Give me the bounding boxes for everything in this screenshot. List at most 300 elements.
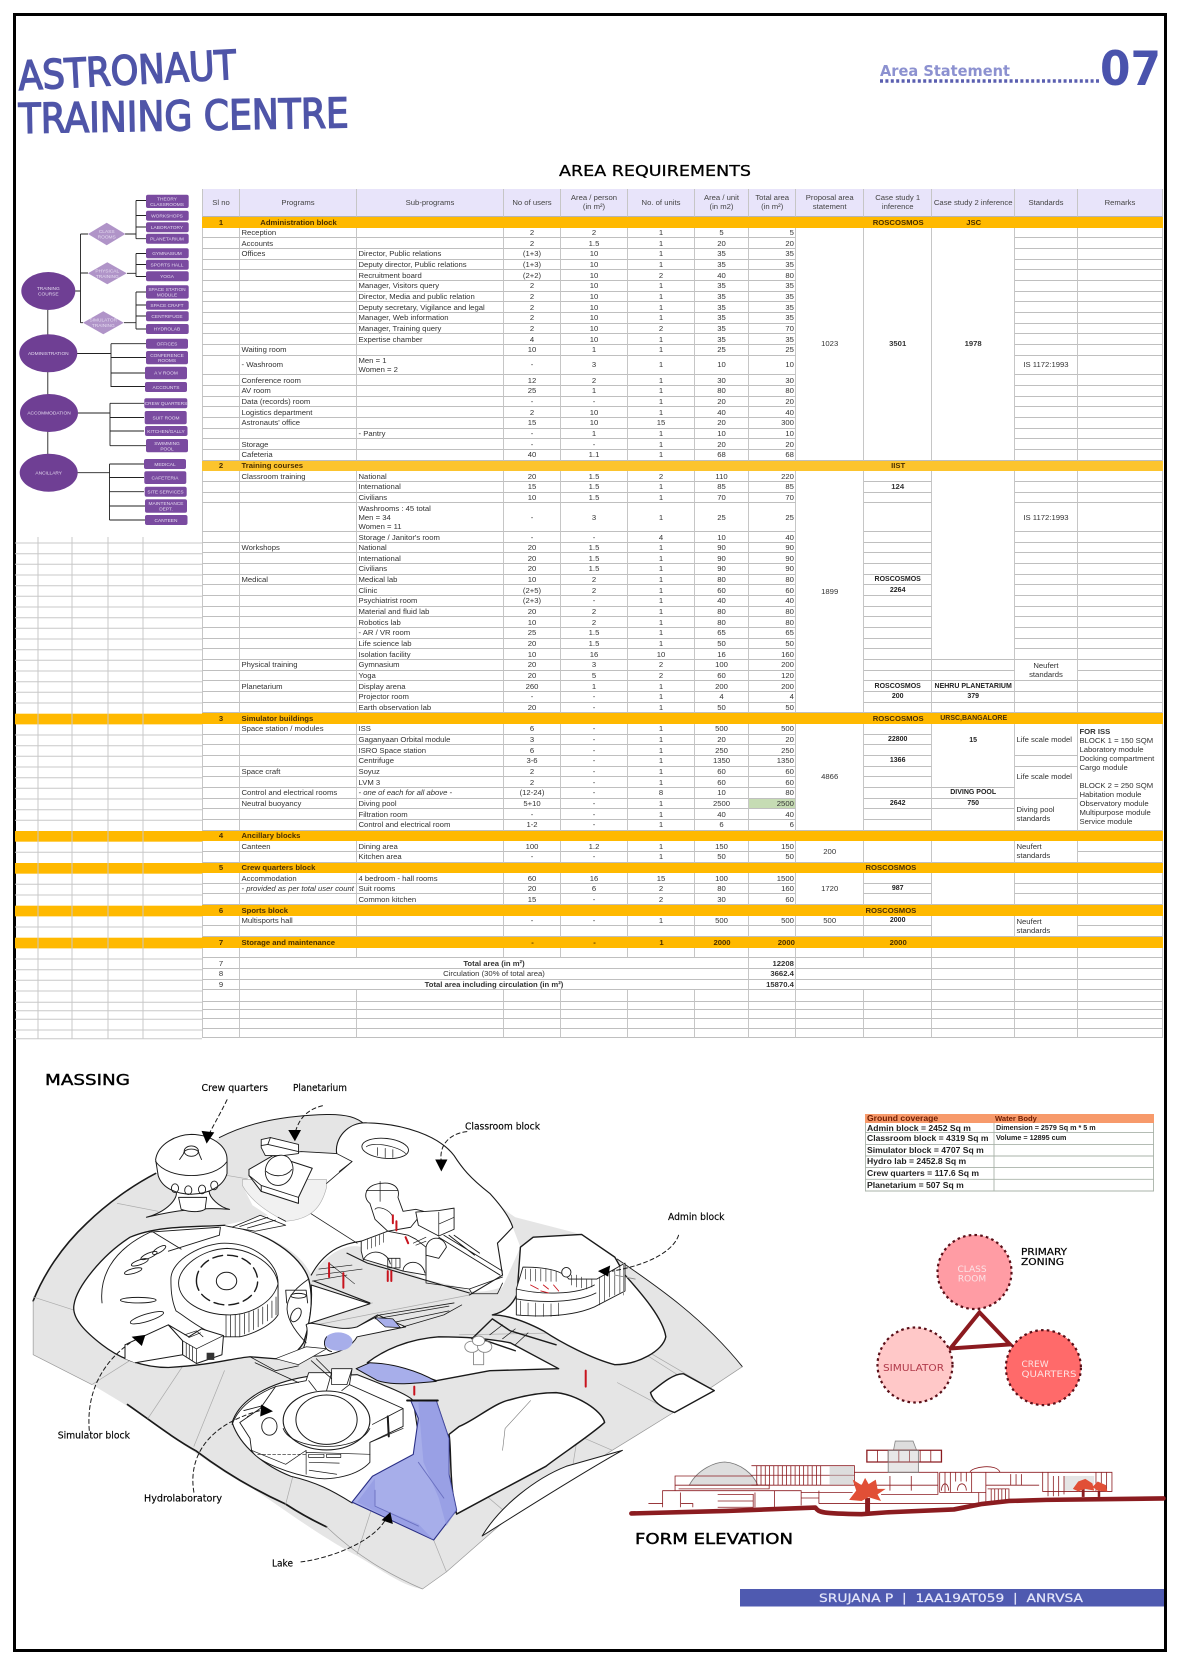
water body rows bbox=[996, 1123, 1096, 1142]
programme box labels: PLANETARIUM bbox=[150, 236, 184, 242]
area requirements table: - bbox=[593, 724, 595, 733]
area requirements table: 10 bbox=[590, 260, 598, 269]
area requirements table: - bbox=[593, 895, 595, 904]
area requirements table: 10 bbox=[717, 360, 726, 369]
area requirements table: - bbox=[593, 852, 595, 861]
programme box labels: SWIMMING bbox=[154, 441, 180, 447]
area requirements table: Women = 2 bbox=[358, 365, 398, 374]
area requirements table: 1720 bbox=[821, 884, 838, 893]
area requirements table: 80 bbox=[785, 271, 794, 280]
area requirements table: 2642 bbox=[890, 800, 905, 807]
programme box labels: DEPT. bbox=[159, 506, 173, 512]
area requirements table: 12208 bbox=[772, 959, 794, 968]
area requirements table: Suit rooms bbox=[358, 884, 395, 893]
area requirements table: 68 bbox=[717, 450, 726, 459]
sheet heading: area statement and number: 07 bbox=[1100, 42, 1161, 97]
area requirements table: 1 bbox=[659, 228, 663, 237]
area requirements table: 80 bbox=[717, 575, 726, 584]
diamond labels: ROOMS bbox=[98, 234, 116, 240]
area requirements table: 10 bbox=[590, 271, 598, 280]
area requirements table: Women = 11 bbox=[358, 522, 402, 531]
area requirements table: Habitation module bbox=[1079, 790, 1141, 799]
area requirements table: 70 bbox=[717, 493, 726, 502]
ground line bbox=[631, 1498, 1163, 1514]
programme box labels: MAINTENANCE bbox=[149, 501, 183, 507]
area requirements table: 20 bbox=[717, 397, 726, 406]
white block: central classroom plateau bbox=[224, 1123, 520, 1292]
area requirements table: 40 bbox=[785, 596, 794, 605]
area requirements table: 2 bbox=[659, 671, 663, 680]
area requirements table: DIVING POOL bbox=[950, 789, 996, 796]
area requirements table: ISRO Space station bbox=[358, 746, 426, 755]
area requirements table: 1 bbox=[659, 842, 663, 851]
area requirements table: 100 bbox=[715, 660, 728, 669]
zone: simulator: SIMULATOR bbox=[883, 1363, 944, 1374]
area requirements table: Reception bbox=[242, 228, 276, 237]
area requirements table: 2 bbox=[530, 239, 534, 248]
area requirements table: Total area (in m²) bbox=[463, 959, 525, 968]
area requirements table: Recruitment board bbox=[358, 271, 422, 280]
area requirements table: 5 bbox=[592, 671, 596, 680]
area requirements table: 6 bbox=[592, 884, 596, 893]
massing labels: Lake bbox=[272, 1558, 293, 1570]
area requirements table: 1 bbox=[659, 799, 663, 808]
area requirements table: 1023 bbox=[821, 339, 838, 348]
area requirements table: 1-2 bbox=[526, 820, 538, 829]
area requirements table: 50 bbox=[717, 703, 726, 712]
area requirements table: 20 bbox=[528, 554, 536, 563]
area requirements table: Filtration room bbox=[358, 810, 408, 819]
hydrolaboratory bbox=[232, 1369, 403, 1479]
area requirements table: 10 bbox=[590, 408, 598, 417]
area requirements table: 1 bbox=[659, 493, 663, 502]
area requirements table: 110 bbox=[715, 472, 728, 481]
area requirements table: 10 bbox=[717, 788, 726, 797]
area requirements table: Workshops bbox=[242, 543, 280, 552]
area requirements table: 2 bbox=[592, 586, 596, 595]
area requirements table: - bbox=[593, 799, 595, 808]
area requirements table: BLOCK 2 = 250 SQM bbox=[1079, 781, 1153, 790]
ellipse labels: TRAINING bbox=[37, 286, 60, 292]
classroom section bbox=[940, 1467, 1043, 1502]
area requirements table: 1 bbox=[659, 852, 663, 861]
area requirements table: 80 bbox=[717, 386, 726, 395]
area requirements table: 4 bbox=[530, 335, 534, 344]
area requirements table: 6 bbox=[790, 820, 794, 829]
ellipse labels: ACCOMMODATION bbox=[27, 411, 71, 417]
area requirements table: 10 bbox=[657, 650, 665, 659]
area requirements table: Multipurpose module bbox=[1079, 808, 1151, 817]
area requirements table: 1.5 bbox=[589, 543, 599, 552]
programme box labels: SPACE STATION bbox=[148, 287, 186, 293]
area requirements table: 2000 bbox=[890, 938, 907, 947]
small pool bbox=[324, 1332, 353, 1351]
area requirements table: 300 bbox=[781, 418, 794, 427]
area requirements table: 20 bbox=[528, 660, 536, 669]
area requirements table: 80 bbox=[785, 607, 794, 616]
area requirements table: Space station / modules bbox=[242, 724, 324, 733]
tower bbox=[867, 1441, 941, 1472]
area requirements table: Robotics lab bbox=[358, 618, 401, 627]
area requirements table: 90 bbox=[785, 564, 794, 573]
area requirements table: 10 bbox=[528, 575, 536, 584]
area requirements table: Area / unit bbox=[704, 193, 739, 202]
area requirements table: 1 bbox=[659, 303, 663, 312]
area requirements table: 35 bbox=[785, 292, 794, 301]
area requirements table: 68 bbox=[785, 450, 794, 459]
area requirements table: 200 bbox=[781, 660, 794, 669]
ground coverage rows: Admin block = 2452 Sq m bbox=[867, 1123, 971, 1133]
area requirements table: Service module bbox=[1079, 817, 1132, 826]
area requirements table: 50 bbox=[785, 852, 794, 861]
area requirements table: 4 bbox=[719, 692, 724, 701]
area requirements table: 25 bbox=[785, 345, 794, 354]
simulator block bbox=[102, 1227, 309, 1364]
area requirements table: International bbox=[358, 482, 401, 491]
area requirements table: 90 bbox=[785, 543, 794, 552]
label: primary zoning: ZONING bbox=[1021, 1257, 1064, 1268]
area requirements table: 25 bbox=[717, 513, 726, 522]
area requirements table: 10 bbox=[590, 303, 598, 312]
connectors bbox=[48, 200, 146, 520]
zone: crew quarters: CREW bbox=[1022, 1360, 1049, 1370]
area requirements table: - bbox=[531, 916, 533, 925]
area requirements table: 1 bbox=[592, 682, 596, 691]
area requirements table: 2 bbox=[530, 767, 534, 776]
area requirements table: 65 bbox=[717, 628, 726, 637]
area requirements table: 1 bbox=[659, 607, 663, 616]
area requirements table: 1 bbox=[659, 543, 663, 552]
programme box labels: OFFICES bbox=[157, 342, 177, 348]
area requirements table: Neufert bbox=[1016, 917, 1042, 926]
area requirements table: (1+3) bbox=[523, 249, 541, 258]
area requirements table: 85 bbox=[717, 482, 726, 491]
area requirements table: URSC,BANGALORE bbox=[940, 715, 1007, 722]
area requirements table: 70 bbox=[785, 324, 794, 333]
area requirements table: Director, Public relations bbox=[358, 249, 441, 258]
area requirements table: 10 bbox=[590, 292, 598, 301]
simulator service wing bbox=[125, 1325, 183, 1363]
area requirements table: 1 bbox=[659, 260, 663, 269]
area requirements table: Centrifuge bbox=[358, 756, 394, 765]
service strip to hydrolab bbox=[250, 1357, 334, 1383]
area requirements table: 250 bbox=[781, 746, 794, 755]
area requirements table: 2000 bbox=[778, 938, 795, 947]
area requirements table: 30 bbox=[717, 376, 726, 385]
area requirements table: 2 bbox=[659, 884, 663, 893]
area requirements table: 2 bbox=[530, 281, 534, 290]
area requirements table: (2+2) bbox=[523, 271, 541, 280]
lake bbox=[352, 1401, 457, 1540]
area requirements table: 1 bbox=[659, 345, 663, 354]
area requirements table: - AR / VR room bbox=[358, 628, 410, 637]
area requirements table: Total area including circulation (in m²) bbox=[425, 980, 563, 989]
classroom block details bbox=[311, 1136, 503, 1303]
area requirements table: Offices bbox=[242, 249, 265, 258]
programme box labels: SITE SERVICES bbox=[147, 490, 184, 496]
massing axonometric drawing bbox=[32, 1099, 743, 1590]
area requirements table: 1 bbox=[659, 408, 663, 417]
area requirements table: 35 bbox=[717, 324, 726, 333]
area requirements table: 40 bbox=[528, 450, 536, 459]
area requirements table: 2500 bbox=[713, 799, 730, 808]
area requirements table: 20 bbox=[528, 607, 536, 616]
form elevation heading: FORM ELEVATION bbox=[635, 1530, 793, 1548]
heading: area requirements: AREA REQUIREMENTS bbox=[559, 162, 751, 180]
area requirements table: 10 bbox=[528, 618, 536, 627]
area requirements table: 1.5 bbox=[589, 554, 599, 563]
diamond nodes bbox=[83, 223, 127, 334]
area requirements table: standards bbox=[1029, 670, 1063, 679]
area requirements table: JSC bbox=[966, 218, 981, 227]
area requirements table: 20 bbox=[528, 703, 536, 712]
area requirements table: Life science lab bbox=[358, 639, 412, 648]
area requirements table: 35 bbox=[717, 249, 726, 258]
area requirements table: 1 bbox=[659, 440, 663, 449]
area requirements table: 60 bbox=[785, 767, 794, 776]
ground coverage table bbox=[865, 1113, 1154, 1192]
area requirements table: 1 bbox=[659, 292, 663, 301]
area requirements table: 8 bbox=[659, 788, 663, 797]
area requirements table: 1.5 bbox=[589, 239, 599, 248]
area requirements table: 1978 bbox=[965, 339, 982, 348]
programme box labels: CAFETERIA bbox=[152, 475, 179, 481]
area requirements table: Standards bbox=[1028, 198, 1063, 207]
area requirements table: 1 bbox=[659, 767, 663, 776]
area requirements table: 5 bbox=[219, 863, 223, 872]
area requirements table: 90 bbox=[785, 554, 794, 563]
massing labels: Admin block bbox=[668, 1212, 725, 1223]
area requirements table: standards bbox=[1016, 926, 1050, 935]
area requirements table: Classroom training bbox=[242, 472, 306, 481]
programme box labels: GYMNASIUM bbox=[152, 251, 182, 257]
area requirements table: 15 bbox=[657, 874, 665, 882]
small trees bbox=[1073, 1479, 1107, 1497]
area requirements table: 3 bbox=[592, 513, 596, 522]
area requirements table: 1500 bbox=[777, 874, 794, 882]
area requirements table: (12-24) bbox=[520, 788, 544, 797]
area requirements table: 200 bbox=[715, 682, 728, 691]
diamond labels: PHYSICAL bbox=[95, 268, 119, 274]
diamond labels bbox=[90, 229, 119, 329]
area requirements table: Neufert bbox=[1033, 661, 1059, 670]
area requirements table: 50 bbox=[717, 639, 726, 648]
zone: simulator bbox=[878, 1328, 952, 1402]
area requirements table: Physical training bbox=[242, 660, 297, 669]
area requirements table: Storage / Janitor's room bbox=[358, 532, 440, 542]
arrow: hydrolaboratory bbox=[193, 1405, 273, 1492]
header row bbox=[865, 1114, 1154, 1123]
area requirements table: 4 bbox=[219, 831, 223, 840]
area requirements table: 16 bbox=[590, 874, 598, 882]
area requirements table: 120 bbox=[781, 671, 794, 680]
area requirements table: 1.1 bbox=[589, 450, 599, 459]
area requirements table: 25 bbox=[785, 513, 794, 522]
area requirements table: - bbox=[593, 746, 595, 755]
credits bar: SRUJANA P | 1AA19AT059 | ANRVSA bbox=[819, 1591, 1083, 1605]
zone: crew quarters bbox=[1006, 1330, 1081, 1405]
area requirements table: Soyuz bbox=[358, 767, 380, 776]
area requirements table: Director, Media and public relation bbox=[358, 292, 475, 301]
area requirements table: 50 bbox=[785, 639, 794, 648]
area requirements table: 2 bbox=[530, 303, 534, 312]
area requirements table: 200 bbox=[823, 847, 836, 856]
area requirements table: 6 bbox=[719, 820, 724, 829]
area requirements table: 35 bbox=[717, 292, 726, 301]
area requirements table: 15 bbox=[528, 418, 536, 427]
area requirements table: 1350 bbox=[777, 756, 794, 765]
area requirements table: 30 bbox=[717, 895, 726, 904]
area requirements table: 2 bbox=[659, 472, 663, 481]
area requirements table: 16 bbox=[717, 650, 726, 659]
area requirements table: Observatory module bbox=[1079, 799, 1149, 808]
area requirements table: Administration block bbox=[260, 218, 337, 227]
area requirements table: 160 bbox=[781, 650, 794, 659]
area requirements table: LVM 3 bbox=[358, 778, 380, 787]
area requirements table: 1 bbox=[659, 513, 663, 522]
programme box labels: YOGA bbox=[160, 274, 175, 280]
area requirements table: Sl no bbox=[212, 198, 230, 207]
area requirements table: 20 bbox=[528, 543, 536, 552]
programme box labels: ACCOUNTS bbox=[153, 385, 179, 391]
area requirements table: 35 bbox=[717, 281, 726, 290]
area requirements table: 60 bbox=[717, 767, 726, 776]
area requirements table: 1.5 bbox=[589, 628, 599, 637]
area requirements table: 2 bbox=[530, 324, 534, 333]
area requirements table: Neufert bbox=[1016, 842, 1042, 851]
area requirements table: 3 bbox=[530, 735, 534, 744]
programme box labels: CENTRIFUGE bbox=[151, 314, 183, 320]
massing labels: Simulator block bbox=[58, 1430, 130, 1442]
area requirements table: Cafeteria bbox=[242, 450, 273, 459]
area requirements table: 40 bbox=[717, 596, 726, 605]
area requirements table: Ancillary blocks bbox=[242, 831, 300, 840]
area requirements table: Life scale model bbox=[1016, 735, 1072, 744]
area requirements table: - bbox=[531, 532, 533, 542]
area requirements table: - bbox=[593, 532, 595, 542]
area requirements table: Canteen bbox=[242, 842, 271, 851]
area requirements table: 1 bbox=[219, 218, 223, 227]
area requirements table: 35 bbox=[785, 313, 794, 322]
area requirements table: 124 bbox=[891, 482, 904, 491]
massing labels: Planetarium bbox=[293, 1083, 347, 1094]
area requirements table: 5 bbox=[719, 228, 724, 237]
area requirements table: 500 bbox=[781, 916, 794, 925]
area requirements table: - bbox=[593, 767, 595, 776]
area requirements table: 20 bbox=[785, 239, 794, 248]
area requirements table: BLOCK 1 = 150 SQM bbox=[1079, 736, 1153, 745]
area requirements table: Storage bbox=[242, 440, 268, 449]
area requirements table: 90 bbox=[717, 554, 726, 563]
area requirements table: NEHRU PLANETARIUM bbox=[935, 683, 1012, 690]
area requirements table: Programs bbox=[281, 198, 315, 207]
sheet heading: area statement and number bbox=[880, 42, 1161, 97]
area requirements table: Astronauts' office bbox=[242, 418, 300, 427]
programme box labels: LABORATORY bbox=[151, 225, 184, 231]
zone: class room: CLASS bbox=[957, 1265, 987, 1275]
area requirements table: 7 bbox=[219, 959, 223, 968]
area requirements table: Proposal area bbox=[806, 193, 854, 202]
header row: Water Body bbox=[995, 1114, 1037, 1123]
area requirements table: 35 bbox=[717, 303, 726, 312]
upper pond bbox=[356, 1363, 436, 1384]
arrow: lake bbox=[301, 1512, 393, 1562]
area requirements table: 10 bbox=[785, 360, 794, 369]
area requirements table: 2 bbox=[659, 324, 663, 333]
area requirements table: 1 bbox=[659, 938, 664, 947]
area requirements table: 90 bbox=[717, 564, 726, 573]
area requirements table: 987 bbox=[892, 885, 904, 892]
area requirements table: 1.5 bbox=[589, 564, 599, 573]
area requirements table: 1 bbox=[659, 778, 663, 787]
area requirements table: 1 bbox=[659, 810, 663, 819]
area requirements table: 1 bbox=[659, 724, 663, 733]
area requirements table: 500 bbox=[715, 724, 728, 733]
white block: simulator platform bbox=[74, 1225, 311, 1367]
area requirements table: 8 bbox=[219, 969, 223, 978]
area requirements table: ROSCOSMOS bbox=[875, 576, 921, 583]
area requirements table: 80 bbox=[717, 607, 726, 616]
massing labels: Hydrolaboratory bbox=[144, 1494, 222, 1504]
site edges bbox=[33, 1114, 742, 1589]
area requirements table: - bbox=[531, 360, 533, 369]
area requirements table: 5+10 bbox=[523, 799, 541, 808]
area requirements table: 1 bbox=[659, 360, 663, 369]
area requirements table: 40 bbox=[785, 408, 794, 417]
area requirements table: 10 bbox=[590, 418, 598, 427]
area requirements table: - bbox=[531, 938, 534, 947]
area requirements table: 2500 bbox=[777, 799, 794, 808]
area requirements table: 3662.4 bbox=[770, 969, 794, 978]
title: ASTRONAUT bbox=[17, 43, 238, 100]
area requirements table: 80 bbox=[785, 618, 794, 627]
area requirements table: IS 1172:1993 bbox=[1023, 360, 1069, 369]
tree bbox=[849, 1478, 886, 1513]
area requirements table: 2 bbox=[592, 575, 596, 584]
area requirements table: 2264 bbox=[890, 587, 905, 594]
diamond labels: CLASS bbox=[99, 229, 115, 235]
area requirements table: 1 bbox=[592, 386, 596, 395]
programme box labels: CREW QUARTERS bbox=[145, 401, 187, 407]
area requirements table: - bbox=[531, 692, 533, 701]
sheet heading: area statement and number: Area Statement bbox=[880, 62, 1010, 80]
area requirements table: Area / person bbox=[571, 193, 617, 202]
area requirements table: - bbox=[593, 692, 595, 701]
area requirements table: Kitchen area bbox=[358, 852, 402, 861]
ground coverage rows: Classroom block = 4319 Sq m bbox=[867, 1133, 989, 1143]
area requirements table: inference bbox=[882, 202, 913, 211]
area requirements table: 25 bbox=[717, 345, 726, 354]
area requirements table: 1 bbox=[659, 746, 663, 755]
area requirements table: 1 bbox=[659, 618, 663, 627]
area requirements table: 60 bbox=[528, 874, 536, 882]
area requirements table: 1 bbox=[659, 249, 663, 258]
area requirements table: Life scale model bbox=[1016, 772, 1072, 781]
area requirements table: Control and electrical room bbox=[358, 820, 450, 829]
area requirements table: 2000 bbox=[713, 938, 731, 947]
area requirements table: 80 bbox=[785, 386, 794, 395]
area requirements table: Simulator buildings bbox=[242, 714, 313, 723]
area requirements table: standards bbox=[1016, 814, 1050, 823]
area requirements table: (2+3) bbox=[523, 596, 541, 605]
massing labels: Classroom block bbox=[465, 1122, 540, 1132]
area requirements table: 500 bbox=[715, 916, 728, 925]
site base bbox=[33, 1114, 742, 1589]
area requirements table: 1 bbox=[659, 628, 663, 637]
area requirements table: 2 bbox=[659, 271, 663, 280]
programme box labels: SPACE CRAFT bbox=[150, 303, 184, 309]
arrow: crew quarters bbox=[202, 1100, 227, 1144]
